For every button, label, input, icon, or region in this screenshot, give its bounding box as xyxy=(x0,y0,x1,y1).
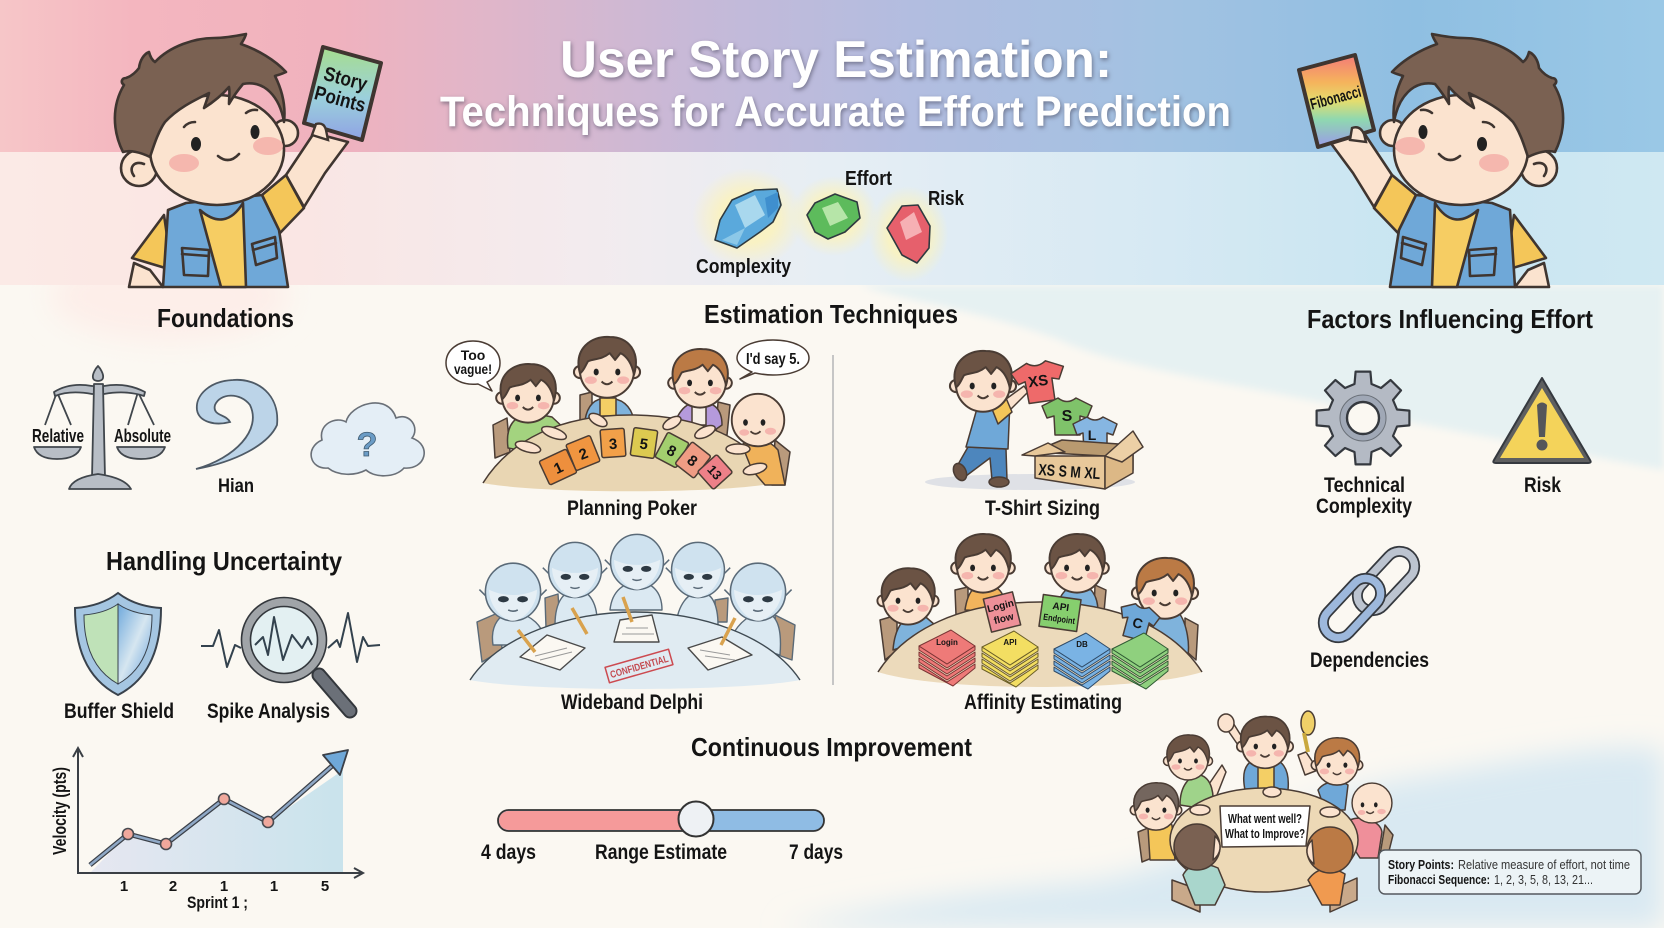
planning poker scene xyxy=(446,337,809,491)
table xyxy=(483,415,775,491)
held note: API Endpoint: API xyxy=(1052,601,1070,614)
gem: effort xyxy=(807,194,860,239)
heading: Factors Influencing Effort: Factors Influencing Effort xyxy=(1307,304,1593,334)
discussion sign: What went well? xyxy=(1228,811,1302,826)
definitions note box: Story Points: xyxy=(1388,857,1454,872)
gem labels: Complexity xyxy=(696,256,792,278)
slider labels: 7 days xyxy=(789,841,843,864)
trend line with arrow xyxy=(90,750,348,865)
gems: complexity, effort, risk xyxy=(692,168,948,282)
gem: risk xyxy=(887,205,930,263)
label: Affinity Estimating: Affinity Estimating xyxy=(964,691,1122,714)
axis labels: 1 xyxy=(120,878,128,895)
axis labels xyxy=(50,767,329,912)
held note: Login flow: flow xyxy=(993,611,1015,627)
note stacks xyxy=(919,630,975,686)
heading: Foundations: Foundations xyxy=(157,303,294,333)
icon: buffer shield xyxy=(75,593,161,695)
label: Technical Complexity: Complexity xyxy=(1316,495,1412,518)
poker cards: 3 xyxy=(608,436,618,453)
cardboard box xyxy=(1022,431,1143,489)
poker cards: 8 xyxy=(664,442,679,461)
speech bubble: Too vague: vague! xyxy=(454,361,492,377)
gem labels: Effort xyxy=(845,168,892,190)
pencils xyxy=(518,597,735,652)
shirt: S: S xyxy=(1062,408,1073,425)
stack captions: API xyxy=(1003,638,1017,647)
card: Story Points: Points xyxy=(312,82,368,117)
gem labels xyxy=(696,168,965,278)
held shirt: C xyxy=(1131,614,1145,632)
stack captions: DB xyxy=(1076,640,1088,649)
discussion sign: What to Improve? xyxy=(1225,826,1305,841)
front children xyxy=(1183,864,1225,905)
icon: gear xyxy=(1317,372,1409,464)
cardboard box: XS S M XL xyxy=(1038,462,1101,483)
shirt: S xyxy=(1042,398,1092,435)
label: Technical Complexity: Technical xyxy=(1324,474,1405,497)
chart area fill xyxy=(90,770,343,873)
label: Buffer Shield: Buffer Shield xyxy=(64,700,174,723)
title: User Story Estimation: xyxy=(560,31,1112,89)
t-shirt sizing scene xyxy=(925,351,1143,490)
card: Fibonacci xyxy=(1299,55,1374,147)
label: Technical Complexity xyxy=(1316,474,1412,518)
icon: warning triangle xyxy=(1493,378,1591,463)
velocity line chart xyxy=(50,748,363,912)
icon: spike analysis magnifier xyxy=(201,598,380,711)
definitions note box: Relative measure of effort, not time xyxy=(1458,857,1630,872)
delphi heads xyxy=(479,563,547,621)
back hands xyxy=(1263,787,1281,797)
table xyxy=(1170,788,1358,892)
heading: Estimation Techniques: Estimation Techniques xyxy=(704,299,958,329)
papers xyxy=(520,615,752,670)
held note: Login flow xyxy=(983,592,1021,632)
card: Story Points: Story xyxy=(321,63,370,96)
card: Fibonacci: Fibonacci xyxy=(1309,84,1363,114)
axis labels: 1 xyxy=(270,878,278,895)
slider labels xyxy=(481,841,843,864)
slider labels: 4 days xyxy=(481,841,536,864)
chart axes xyxy=(73,748,363,878)
speech bubble: Too vague xyxy=(446,341,500,391)
players xyxy=(877,568,939,624)
swirl label: Hian xyxy=(218,476,254,497)
poker cards xyxy=(539,427,733,490)
label: Risk: Risk xyxy=(1524,474,1561,497)
poker cards: 8 xyxy=(684,452,701,470)
players xyxy=(496,364,560,423)
shirt: XS: XS xyxy=(1027,372,1049,391)
affinity estimating scene xyxy=(877,534,1202,689)
stack captions xyxy=(936,638,1088,649)
speech bubble: I'd say 5: I'd say 5. xyxy=(746,351,800,368)
speech bubble: Too vague: Too xyxy=(461,347,485,363)
stack captions: Login xyxy=(936,638,958,647)
label: Spike Analysis: Spike Analysis xyxy=(207,700,330,723)
raised arms xyxy=(1222,718,1250,750)
axis labels: Sprint 1 ; xyxy=(187,893,248,912)
scale labels: Absolute xyxy=(114,426,171,446)
definitions note box: Fibonacci Sequence: xyxy=(1388,872,1490,887)
confidential stamp: CONFIDENTIAL xyxy=(609,654,670,681)
right character holding Fibonacci card xyxy=(1299,34,1563,287)
table xyxy=(878,602,1202,687)
shirt: L: L xyxy=(1088,427,1097,443)
held note: Login flow: Login xyxy=(986,598,1015,615)
axis labels: 2 xyxy=(169,878,177,895)
gem: complexity xyxy=(715,189,781,248)
definitions note box xyxy=(1379,850,1641,894)
table xyxy=(470,612,800,689)
icon: swirl wave xyxy=(196,380,277,469)
icon: balance scale xyxy=(34,366,165,489)
poker cards: 5 xyxy=(638,435,649,453)
poker cards: 1 xyxy=(551,459,566,478)
held note: API Endpoint xyxy=(1039,595,1081,631)
definitions note box: 1, 2, 3, 5, 8, 13, 21... xyxy=(1494,872,1593,887)
label: T-Shirt Sizing: T-Shirt Sizing xyxy=(985,497,1100,520)
axis labels: Velocity (pts) xyxy=(50,767,70,855)
icon: cloud with question mark: ? xyxy=(357,426,377,464)
divider between techniques xyxy=(832,355,834,685)
axis labels: 1 xyxy=(220,878,228,895)
shirt: L xyxy=(1073,417,1117,452)
icon: chain links xyxy=(1317,545,1421,644)
players xyxy=(1237,716,1293,768)
held note: API Endpoint: Endpoint xyxy=(1043,612,1076,626)
poker cards: 13 xyxy=(704,462,725,483)
data points xyxy=(122,794,274,850)
front chairs xyxy=(1172,880,1200,912)
card: Story Points xyxy=(304,47,381,140)
gem labels: Risk xyxy=(928,188,965,210)
label: Wideband Delphi: Wideband Delphi xyxy=(561,691,703,714)
retrospective scene xyxy=(1130,711,1393,912)
wideband delphi scene xyxy=(470,534,800,689)
label: Dependencies: Dependencies xyxy=(1310,649,1429,672)
icon: cloud with question mark xyxy=(311,403,424,476)
axis labels: 5 xyxy=(321,878,329,895)
speech bubble: I'd say 5 xyxy=(737,340,809,379)
bodies xyxy=(1244,758,1288,790)
range estimate slider xyxy=(481,802,843,864)
heading: Continuous Improvement: Continuous Improvement xyxy=(691,732,972,762)
poker cards: 2 xyxy=(577,445,591,464)
shirt: XS xyxy=(1010,358,1068,405)
left character holding Story Points card xyxy=(115,34,381,287)
heading: Handling Uncertainty: Handling Uncertainty xyxy=(106,546,342,576)
title xyxy=(440,31,1231,136)
slider labels: Range Estimate xyxy=(595,841,727,864)
scale labels: Relative xyxy=(32,426,84,446)
label: Planning Poker: Planning Poker xyxy=(567,497,697,520)
scale labels xyxy=(32,426,171,446)
title: Techniques for Accurate Effort Prediction xyxy=(440,88,1231,136)
discussion sign xyxy=(1220,806,1310,847)
held shirt xyxy=(1114,600,1162,644)
